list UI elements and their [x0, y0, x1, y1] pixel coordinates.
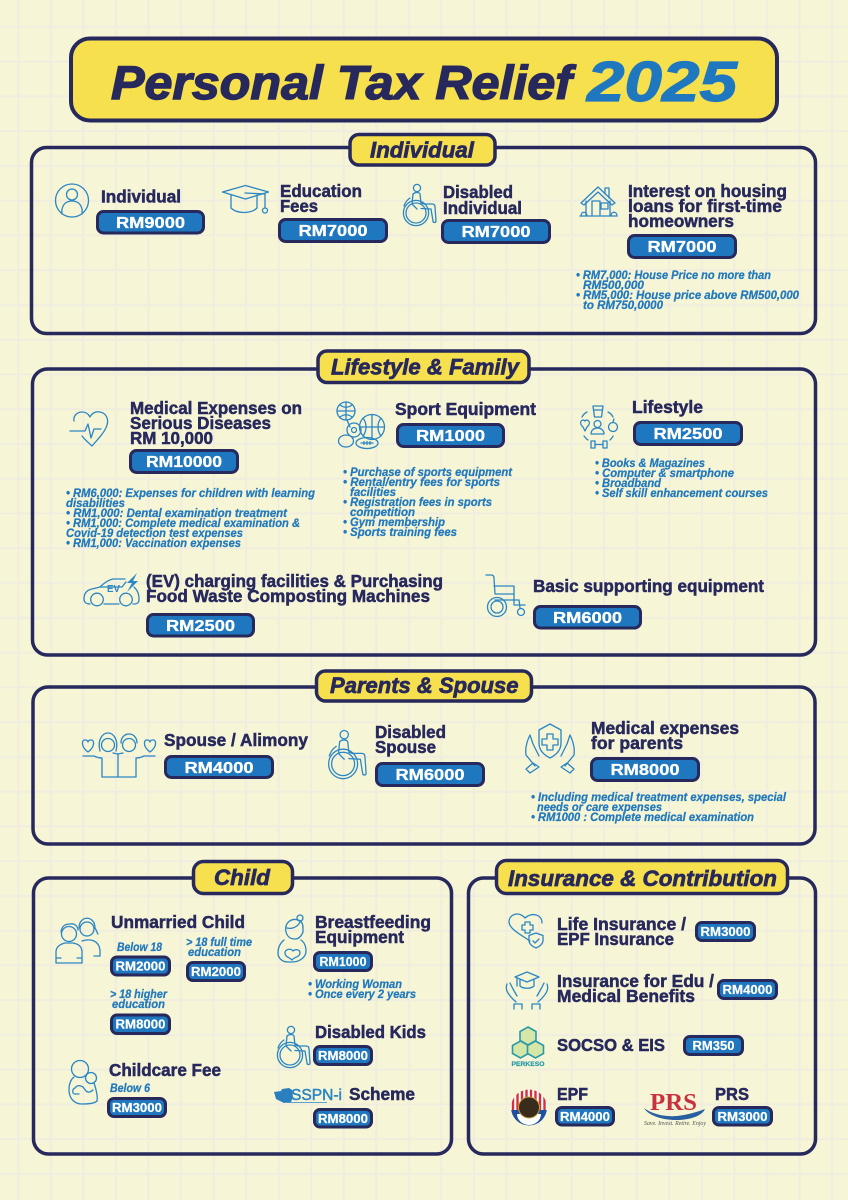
amount: RM7000	[298, 223, 368, 240]
label: RM 10,000	[130, 428, 213, 448]
icon: parent holding child	[69, 1060, 97, 1104]
label: Life Insurance /	[557, 914, 686, 934]
amount	[442, 220, 550, 242]
icon: sports balls	[337, 402, 384, 448]
tier: over 18 full time: > 18 full time	[186, 937, 253, 949]
label: Education	[280, 181, 362, 201]
notes	[576, 270, 800, 312]
icon: couple	[82, 733, 156, 777]
title year: 2025	[586, 50, 739, 114]
notes: competition	[350, 507, 415, 519]
amount: RM2500	[166, 618, 235, 635]
amount	[628, 236, 736, 258]
amount	[130, 450, 238, 472]
icon: EV car	[84, 579, 139, 606]
label: SOCSO & EIS	[557, 1035, 665, 1055]
notes: • Purchase of sports equipment	[343, 467, 513, 479]
tier: over 18 full time	[186, 937, 253, 980]
amount: RM3000	[112, 1101, 162, 1115]
item: Disabled Individual	[403, 182, 550, 242]
logo: PERKESO: PERKESO	[512, 1062, 545, 1068]
notes: • Rental/entry fees for sports	[343, 477, 500, 489]
notes: • RM6,000: Expenses for children with learning	[66, 488, 315, 500]
label: Disabled	[443, 182, 513, 202]
amount: RM8000	[318, 1049, 368, 1063]
item: Unmarried Child	[56, 912, 253, 1034]
label: (EV) charging facilities & Purchasing	[146, 571, 443, 591]
notes: • RM7,000: House Price no more than	[576, 270, 771, 282]
amount: RM3000	[718, 1110, 768, 1124]
item: Disabled Kids	[277, 1022, 426, 1068]
logo: SSPN-i: SSPN-i	[291, 1087, 342, 1104]
notes: Covid-19 detection test expenses	[66, 528, 243, 540]
icon: mother and baby	[278, 915, 306, 962]
amount: RM9000	[116, 215, 185, 232]
icon: wheelchair	[486, 575, 525, 616]
label	[146, 571, 443, 606]
item: Disabled Spouse	[329, 722, 484, 786]
icon: graduation cap	[222, 186, 268, 213]
amount: RM8000	[318, 1112, 368, 1126]
heading: Insurance & Contribution: Insurance & Contribution	[508, 866, 777, 891]
panel: Lifestyle & Family	[32, 351, 816, 655]
amount	[280, 220, 386, 242]
item: Breastfeeding Equipment	[278, 912, 431, 1001]
notes: needs or care expenses	[537, 802, 662, 814]
notes: facilities	[350, 487, 396, 499]
icon: person	[56, 184, 88, 217]
heading: Parents & Spouse: Parents & Spouse	[330, 673, 518, 698]
amount	[314, 952, 372, 970]
notes: • RM1,000: Dental examination treatment	[66, 508, 288, 520]
label	[591, 718, 739, 753]
amount	[314, 1110, 372, 1127]
heading: Insurance & Contribution	[496, 860, 788, 894]
heading: Individual	[350, 134, 495, 165]
item: Insurance for Edu / Medical Benefits	[506, 971, 776, 1009]
amount: RM6000	[396, 767, 465, 784]
tier: over 18 higher education	[110, 989, 170, 1034]
heading: Lifestyle & Family: Lifestyle & Family	[331, 354, 521, 380]
label: Scheme	[349, 1084, 415, 1104]
label: for parents	[591, 733, 683, 753]
notes: • Sports training fees	[343, 527, 457, 539]
icon: wheelchair	[329, 730, 366, 779]
amount: RM350	[692, 1039, 735, 1053]
label	[557, 971, 714, 1006]
title text: Personal Tax Relief	[111, 56, 577, 109]
item: Housing loan interest	[576, 181, 800, 312]
tier: over 18 full time: RM2000	[191, 965, 241, 979]
logo: PERKESO	[512, 1027, 545, 1068]
item: Medical expenses for parents	[526, 718, 787, 824]
label: EPF	[557, 1084, 588, 1104]
amount	[592, 758, 698, 780]
amount	[314, 1046, 372, 1064]
amount: RM2500	[654, 426, 723, 443]
notes: • RM1,000: Vaccination expenses	[66, 538, 241, 550]
heading: Individual: Individual	[370, 138, 475, 162]
item: EPF	[511, 1088, 615, 1126]
amount: RM3000	[700, 925, 751, 939]
notes: • Registration fees in sports	[343, 497, 492, 509]
notes	[66, 488, 315, 550]
label: Medical Expenses on	[130, 398, 302, 418]
icon: heart with pulse	[70, 412, 108, 446]
text: EV badge: EV	[107, 583, 120, 595]
label: Lifestyle	[632, 397, 703, 417]
label: homeowners	[628, 211, 734, 231]
icon: lightning bolt	[127, 573, 138, 592]
amount	[684, 1036, 742, 1054]
label: PRS	[715, 1084, 749, 1104]
amount: RM8000	[610, 762, 680, 779]
notes: • RM1000 : Complete medical examination	[531, 812, 754, 824]
amount	[98, 212, 204, 233]
icon: house	[580, 187, 617, 216]
logo: PRS	[644, 1090, 706, 1127]
amount	[696, 922, 754, 940]
amount	[148, 614, 254, 636]
icon: wheelchair	[277, 1026, 310, 1068]
notes	[343, 467, 513, 539]
tier: below 18	[112, 942, 170, 975]
label	[557, 914, 686, 949]
label: Interest on housing	[628, 181, 787, 201]
label	[130, 398, 302, 448]
icon: two children	[56, 918, 100, 963]
item: PRS	[644, 1084, 772, 1127]
label: Medical Benefits	[557, 986, 695, 1006]
condition: Below 6	[110, 1083, 151, 1095]
tier: over 18 higher education: RM8000	[116, 1018, 166, 1032]
label: Individual	[443, 198, 522, 218]
item: Lifestyle	[581, 397, 768, 500]
amount	[718, 980, 776, 998]
amount	[166, 756, 272, 778]
panel: Individual	[32, 134, 816, 334]
notes: • Books & Magazines	[595, 458, 705, 470]
label: loans for first-time	[628, 196, 782, 216]
notes: • Gym membership	[343, 517, 445, 529]
label: Disabled	[375, 722, 446, 742]
notes: • Once every 2 years	[308, 989, 416, 1001]
notes: RM500,000	[583, 280, 645, 292]
notes: • Including medical treatment expenses, special	[531, 792, 787, 804]
notes: • RM5,000: House price above RM500,000	[576, 290, 800, 302]
notes	[531, 792, 787, 824]
item: Sport Equipment	[337, 399, 536, 539]
label	[375, 722, 446, 757]
label: Insurance for Edu /	[557, 971, 714, 991]
heading: Child: Child	[214, 865, 271, 890]
notes: to RM750,0000	[583, 300, 664, 312]
amount: RM1000	[320, 955, 367, 969]
label	[315, 912, 431, 947]
notes: • Broadband	[595, 478, 662, 490]
notes: disabilities	[66, 498, 125, 510]
logo: PRS: Save. Invest. Retire. Enjoy	[644, 1121, 706, 1127]
panel: Insurance & Contribution	[468, 860, 816, 1154]
item: Life Insurance	[509, 914, 754, 949]
label: Medical expenses	[591, 718, 739, 738]
label	[443, 182, 522, 218]
logo: EPF	[511, 1090, 547, 1126]
label: Serious Diseases	[130, 413, 271, 433]
amount	[376, 764, 484, 786]
tier: below 18: Below 18	[117, 942, 163, 954]
title banner	[71, 38, 777, 120]
panel: Parents & Spouse	[33, 671, 815, 844]
label	[628, 181, 787, 231]
label: Spouse / Alimony	[164, 730, 308, 750]
panel: Child	[34, 862, 452, 1154]
item: Spouse / Alimony	[82, 730, 308, 778]
tier: below 18: RM2000	[116, 960, 166, 974]
item: Individual relief	[56, 184, 204, 233]
label	[280, 181, 362, 216]
notes: • Self skill enhancement courses	[595, 488, 768, 500]
item: Education Fees	[222, 181, 386, 242]
amount	[534, 606, 640, 628]
amount: RM4000	[722, 983, 773, 997]
icon: wheelchair	[403, 184, 436, 226]
amount: RM4000	[560, 1110, 610, 1124]
notes: • Working Woman	[308, 979, 402, 991]
icon: shield in hands	[526, 724, 574, 773]
heading: Child	[194, 862, 292, 894]
icon: cap in hands	[506, 972, 548, 1009]
item: SOCSO & EIS	[512, 1027, 742, 1068]
amount	[108, 1098, 166, 1116]
item: Basic supporting equipment	[486, 575, 764, 628]
label: Breastfeeding	[315, 912, 431, 932]
label: Childcare Fee	[109, 1060, 221, 1080]
notes: • RM1,000: Complete medical examination &	[66, 518, 300, 530]
amount: RM10000	[146, 454, 222, 471]
label: Disabled Kids	[315, 1022, 426, 1042]
label: Basic supporting equipment	[533, 576, 764, 596]
item: EV charging	[84, 571, 443, 636]
amount	[634, 422, 742, 444]
amount: RM1000	[416, 428, 485, 445]
amount: RM4000	[184, 760, 254, 777]
logo: PRS: PRS	[650, 1090, 697, 1116]
amount: RM7000	[462, 224, 531, 241]
label: Unmarried Child	[111, 912, 245, 932]
label: Spouse	[375, 737, 436, 757]
amount: RM6000	[553, 610, 622, 627]
tier: over 18 full time: education	[188, 947, 241, 959]
amount: RM7000	[648, 239, 717, 256]
label: Food Waste Composting Machines	[146, 586, 430, 606]
amount	[398, 424, 504, 446]
label: Equipment	[315, 927, 404, 947]
label: Sport Equipment	[395, 399, 536, 419]
item: Childcare Fee	[69, 1060, 221, 1116]
tier: over 18 higher education: education	[112, 999, 165, 1011]
label: EPF Insurance	[557, 929, 674, 949]
tier: over 18 higher education: > 18 higher	[110, 989, 167, 1001]
notes: • Computer & smartphone	[595, 468, 735, 480]
item: Medical expenses	[66, 398, 315, 550]
label: Individual	[101, 186, 181, 206]
icon: heart and shield	[509, 914, 543, 948]
notes	[308, 979, 416, 1001]
label: Fees	[280, 196, 318, 216]
icon: lifestyle circle	[581, 406, 618, 448]
notes	[595, 458, 768, 500]
item: SSPN-i Scheme	[274, 1084, 415, 1127]
